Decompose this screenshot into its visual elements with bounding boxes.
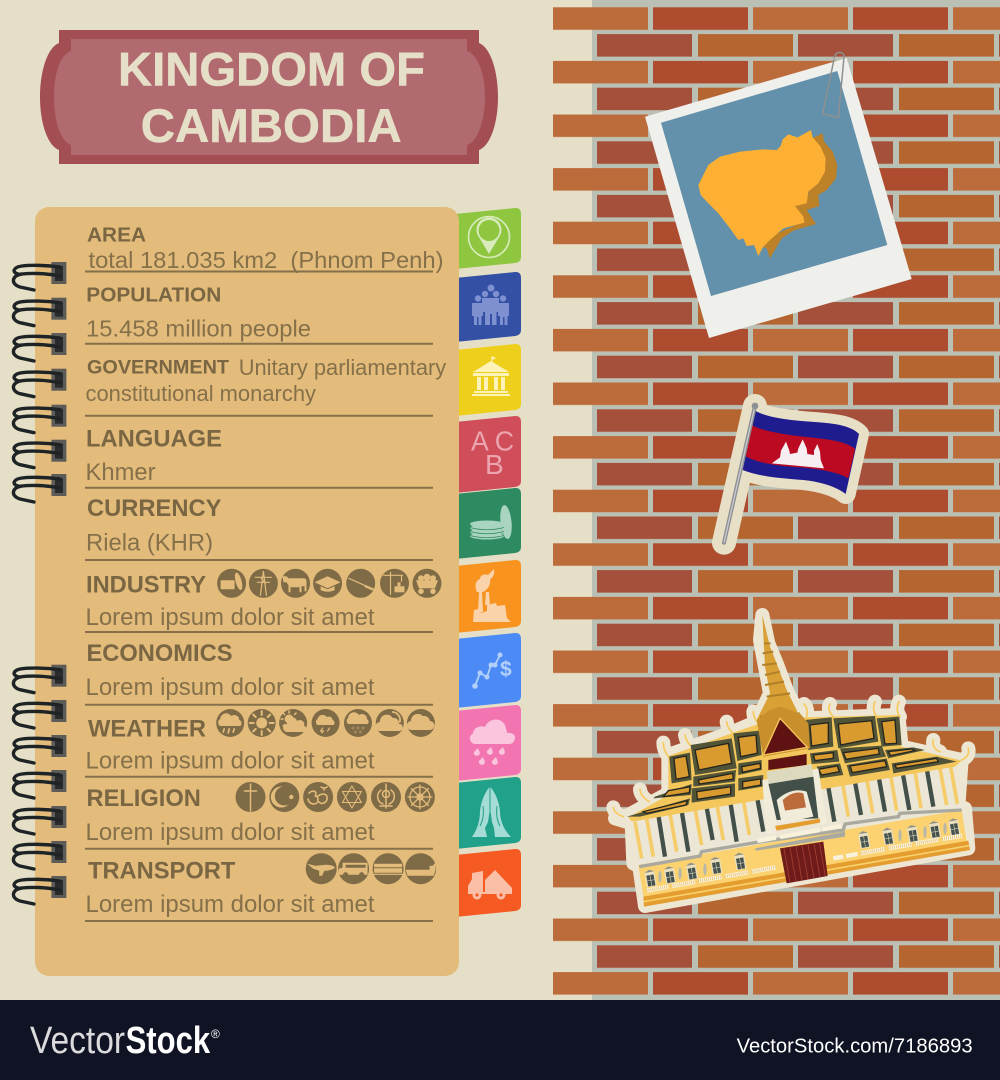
palace balustrades bbox=[647, 826, 962, 891]
section: language bbox=[85, 427, 433, 488]
flag red band bbox=[745, 425, 855, 478]
section: government: Unitary parliamentary bbox=[239, 355, 446, 380]
VectorStock logo: Vector bbox=[30, 1020, 125, 1062]
section: government: GOVERNMENT bbox=[87, 356, 229, 378]
palace sticker outline bbox=[613, 615, 969, 906]
title plaque: KINGDOM OF bbox=[118, 44, 425, 97]
tab: language letters bbox=[455, 416, 521, 493]
tab: economics chart bbox=[455, 633, 521, 708]
section: population: 15.458 million people bbox=[86, 316, 311, 342]
section: transport: TRANSPORT bbox=[88, 859, 236, 885]
map of Cambodia bbox=[698, 130, 837, 258]
tab: transport truck bbox=[455, 849, 521, 917]
Cambodian flag sticker bbox=[724, 403, 859, 543]
coloured side tabs with icons bbox=[455, 208, 521, 917]
tab: government building bbox=[455, 344, 521, 416]
royal palace sticker bbox=[613, 615, 970, 907]
tab: weather cloud bbox=[455, 705, 521, 781]
paper clip bbox=[823, 52, 844, 117]
transport icons bbox=[306, 853, 436, 884]
VectorStock logo bbox=[30, 1020, 220, 1062]
section: population: POPULATION bbox=[86, 284, 221, 307]
flag blue bands bbox=[743, 411, 859, 494]
section: weather: WEATHER bbox=[88, 717, 206, 743]
section: currency: Riela (KHR) bbox=[86, 530, 213, 557]
section: currency bbox=[85, 496, 433, 560]
flag pole bbox=[724, 403, 758, 543]
section: weather bbox=[85, 709, 435, 777]
title plaque bbox=[40, 30, 498, 164]
tab: area location bbox=[455, 208, 521, 269]
VectorStock logo: Stock bbox=[126, 1020, 211, 1062]
title plaque: CAMBODIA bbox=[141, 100, 402, 153]
section: population bbox=[85, 284, 433, 344]
section: economics bbox=[85, 641, 433, 705]
weather icons bbox=[216, 709, 435, 737]
palace spire bbox=[757, 615, 810, 770]
photo frame bbox=[645, 58, 912, 338]
tab: language letters: B bbox=[485, 449, 504, 480]
section: economics: Lorem ipsum dolor sit amet bbox=[86, 674, 375, 701]
palace central gate bbox=[762, 764, 827, 835]
section: area: total 181.035 km2 (Phnom Penh) bbox=[88, 247, 444, 273]
section: industry: INDUSTRY bbox=[86, 572, 206, 598]
section: economics: ECONOMICS bbox=[86, 641, 232, 667]
section: transport: Lorem ipsum dolor sit amet bbox=[86, 891, 375, 918]
tab: population people bbox=[455, 272, 521, 342]
brick wall bbox=[553, 0, 1000, 1000]
section: government: constitutional monarchy bbox=[86, 381, 316, 406]
photo blue background bbox=[661, 71, 887, 296]
palace finials bbox=[613, 702, 969, 817]
religion icons bbox=[236, 782, 435, 812]
section: weather: Lorem ipsum dolor sit amet bbox=[86, 748, 375, 775]
section: transport bbox=[85, 853, 436, 921]
section: industry bbox=[85, 569, 442, 632]
palace roof bbox=[627, 715, 962, 822]
tab: currency coins bbox=[455, 488, 521, 559]
polaroid photo with country map bbox=[645, 52, 912, 338]
flag temple emblem bbox=[772, 439, 824, 468]
section: area: AREA bbox=[87, 224, 146, 247]
flag sticker outline bbox=[724, 406, 859, 543]
industry icons bbox=[217, 569, 442, 598]
tab: economics chart: $ bbox=[500, 658, 512, 681]
section: religion: Lorem ipsum dolor sit amet bbox=[86, 819, 375, 846]
section: religion bbox=[85, 782, 435, 849]
palace door bbox=[780, 842, 828, 883]
tab: language letters: A C bbox=[471, 426, 514, 457]
spiral binding: lower block bbox=[13, 665, 66, 904]
spiral binding: upper block bbox=[13, 262, 66, 502]
section: area bbox=[85, 224, 444, 273]
palace yellow base wall bbox=[638, 810, 970, 907]
image id url: VectorStock.com/7186893 bbox=[737, 1036, 973, 1058]
notebook page panel bbox=[35, 207, 459, 976]
tab: religion praying hands bbox=[455, 777, 521, 849]
tab: industry factory bbox=[455, 560, 521, 633]
palace windows and vents bbox=[644, 818, 961, 887]
palace colonnade bbox=[632, 767, 962, 863]
section: industry: Lorem ipsum dolor sit amet bbox=[86, 604, 375, 631]
watermark footer band bbox=[0, 1000, 1000, 1080]
section: language: LANGUAGE bbox=[86, 427, 222, 453]
section: religion: RELIGION bbox=[86, 786, 201, 812]
section: language: Khmer bbox=[86, 459, 156, 486]
VectorStock logo: ® bbox=[211, 1027, 220, 1041]
section: government bbox=[85, 355, 446, 416]
section: currency: CURRENCY bbox=[87, 496, 222, 522]
